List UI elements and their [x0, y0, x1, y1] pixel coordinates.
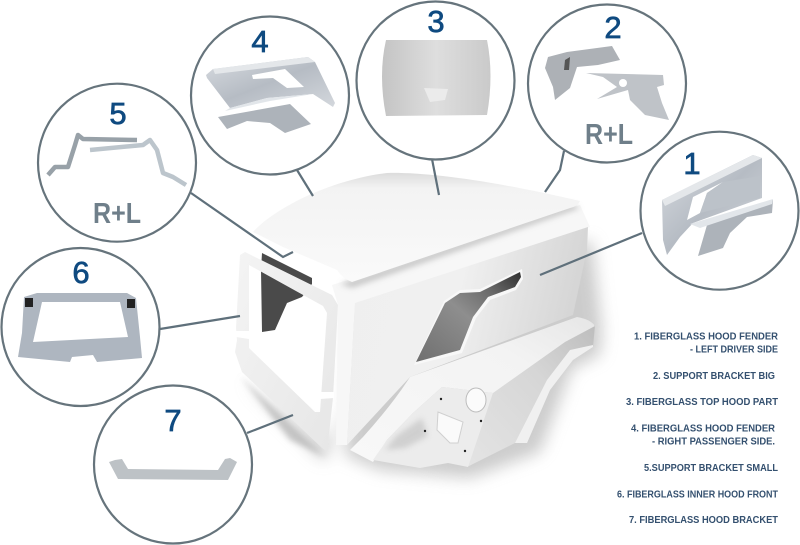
part: big brackets: [545, 46, 669, 120]
panel: part 7: [94, 386, 252, 544]
panel: part 4: [191, 16, 349, 174]
roof top hood: [253, 173, 580, 282]
hood assembly: [235, 173, 602, 478]
legend: parts list: 1. FIBERGLASS HOOD FENDER: [634, 332, 779, 342]
wheel arch strip: [515, 345, 593, 443]
drop shadow: [243, 240, 602, 478]
number 2: 2: [604, 10, 622, 45]
number 4: 4: [251, 24, 269, 59]
part: top hood: [382, 40, 490, 116]
inner hood front dark cavity: [261, 253, 312, 332]
number 5: 5: [109, 96, 127, 131]
frame breaks: [236, 331, 334, 399]
panel: part 2: [528, 4, 686, 162]
label R+L: R+L: [585, 119, 633, 151]
side window opening: [414, 269, 523, 365]
inner hood front frame: [235, 252, 338, 452]
roof underside shadow: [340, 204, 580, 288]
side panel: [347, 227, 588, 445]
fender side: [467, 325, 595, 467]
panel: part 3: [356, 2, 514, 160]
fender front opening: [373, 387, 493, 468]
part: small brackets: [48, 135, 186, 185]
number 3: 3: [427, 4, 445, 39]
legend: parts list: 5.SUPPORT BRACKET SMALL: [644, 463, 778, 474]
upper body band: [332, 205, 590, 445]
leader lines: [160, 151, 642, 433]
part: right fender: [206, 57, 335, 133]
legend: parts list: - RIGHT PASSENGER SIDE.: [652, 436, 775, 448]
legend: parts list: 2. SUPPORT BRACKET BIG: [653, 371, 775, 382]
panel: part 1: [640, 132, 798, 290]
part: inner hood front: [18, 293, 142, 362]
legend: parts list: 6. FIBERGLASS INNER HOOD FRONT: [617, 490, 779, 500]
legend: parts list: [617, 332, 779, 526]
number 7: 7: [164, 403, 182, 438]
panel: part 6: [2, 248, 160, 406]
number 1: 1: [683, 146, 701, 181]
legend: parts list: 7. FIBERGLASS HOOD BRACKET: [629, 515, 779, 526]
part: hood bracket: [109, 458, 237, 480]
legend: parts list: 4. FIBERGLASS HOOD FENDER: [631, 424, 776, 434]
part: left fender: [662, 155, 773, 256]
number 6: 6: [72, 255, 90, 290]
label R+L: R+L: [93, 198, 141, 230]
panel: part 5: [38, 84, 196, 242]
fender top: [350, 317, 595, 462]
legend: parts list: 3. FIBERGLASS TOP HOOD PART: [626, 397, 779, 408]
legend: parts list: - LEFT DRIVER SIDE: [690, 344, 778, 356]
frame shadow: [240, 376, 328, 458]
